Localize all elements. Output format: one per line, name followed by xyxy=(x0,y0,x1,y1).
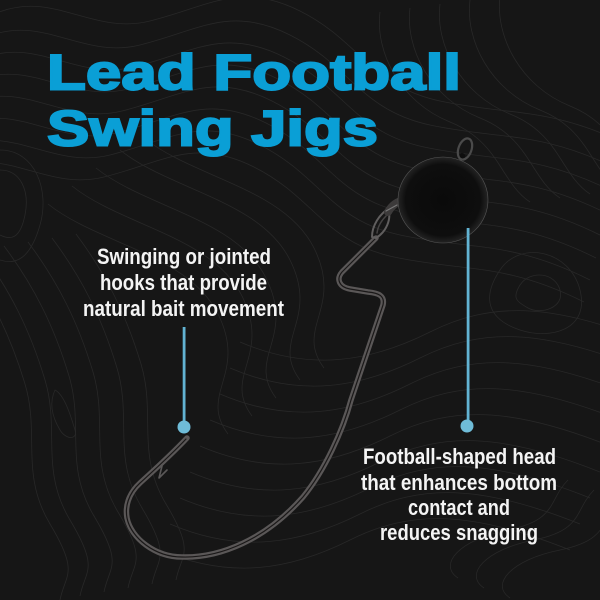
title: Lead Football xyxy=(47,44,461,100)
hook: shank, bend and point xyxy=(126,238,383,557)
title xyxy=(47,44,461,156)
icon: lead football swing jig xyxy=(126,136,488,557)
callout: swinging hooks: Swinging or jointed xyxy=(97,244,271,269)
callout: football head: that enhances bottom xyxy=(361,470,557,495)
callout: swinging hooks xyxy=(83,244,285,434)
callout: swinging hooks: natural bait movement xyxy=(83,296,285,321)
link and swivel xyxy=(372,200,416,238)
title: Swing Jigs xyxy=(47,100,378,156)
callout: swinging hooks: hooks that provide xyxy=(100,270,267,295)
callout: football head xyxy=(361,228,557,545)
callout: football head: Football-shaped head xyxy=(363,444,556,469)
callout: football head: reduces snagging xyxy=(380,520,538,545)
jig head xyxy=(398,157,488,243)
callout: football head: contact and xyxy=(408,495,510,520)
line eye xyxy=(455,136,475,164)
